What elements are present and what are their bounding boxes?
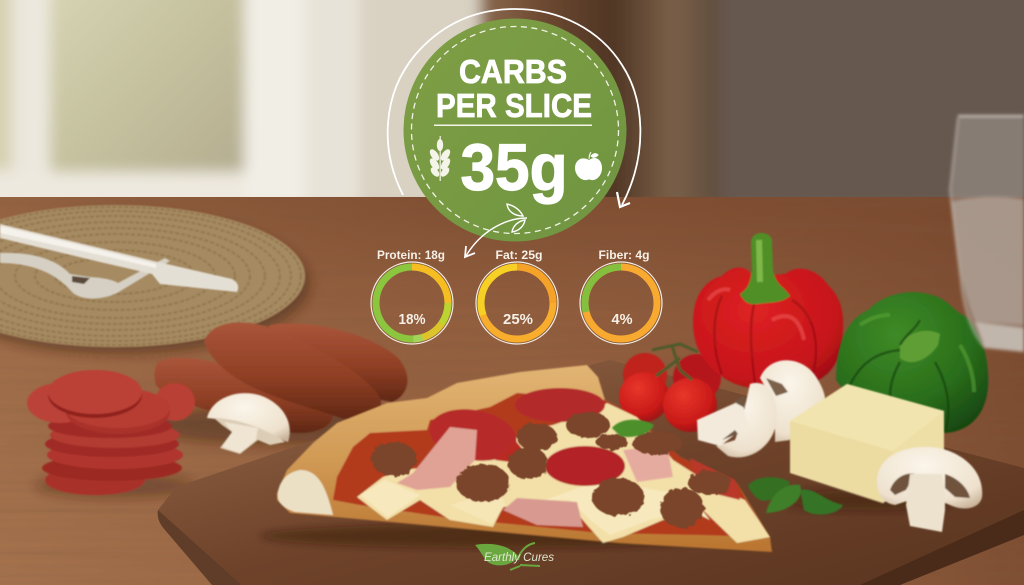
cut bread face — [278, 470, 333, 515]
dashed inner ring — [412, 26, 618, 234]
pepperoni stack — [27, 370, 195, 498]
left mushroom — [207, 393, 290, 454]
carbs badge: PER SLICE — [436, 87, 592, 124]
background: room wall, window and curtain — [0, 0, 1024, 212]
carbs badge — [388, 9, 640, 257]
protein ring: 18% — [398, 311, 426, 328]
front sausage — [204, 323, 381, 420]
divider under heading — [434, 124, 592, 126]
back sausage — [258, 323, 407, 402]
icon: apple — [575, 152, 602, 180]
lower sausage — [154, 358, 333, 433]
front mushroom — [877, 447, 982, 532]
fiber ring: Fiber: 4g — [598, 250, 650, 262]
heading: CARBS — [459, 53, 567, 90]
crust and base — [277, 365, 772, 552]
sauce — [333, 393, 768, 537]
fat ring: Fat: 25g — [496, 250, 542, 262]
fiber ring — [580, 250, 662, 344]
icon: wheat — [428, 136, 452, 181]
pepperoni slices — [515, 388, 605, 422]
fiber ring: 4% — [612, 311, 632, 328]
green bell pepper — [836, 292, 988, 433]
mushrooms behind cheese — [697, 360, 825, 457]
sausage crumbles on pizza — [371, 412, 732, 528]
fat ring — [476, 250, 558, 344]
sausages — [150, 323, 410, 445]
cutting board — [158, 360, 1024, 585]
basil leaf on pizza — [612, 420, 654, 437]
sliced mushroom — [716, 383, 777, 457]
cutlery: knife and fork — [0, 224, 238, 299]
placemat — [0, 205, 310, 354]
circular arrow — [388, 9, 640, 207]
leaf sprig arrow — [465, 204, 527, 257]
bacon pieces — [397, 427, 477, 490]
red bell pepper — [693, 233, 843, 392]
melted cheese — [357, 403, 770, 543]
pizza slice — [260, 365, 772, 552]
cheese block — [785, 384, 955, 510]
tomatoes — [619, 344, 721, 432]
standing mushroom — [760, 360, 825, 442]
protein ring — [371, 250, 453, 344]
nutrient rings — [371, 250, 662, 344]
badge circle — [404, 18, 626, 242]
background: wooden table — [0, 197, 1024, 585]
logo: Earthly Cures: Earthly Cures — [484, 550, 554, 564]
logo: Earthly Cures — [475, 543, 554, 570]
protein ring: Protein: 18g — [377, 250, 445, 262]
value: 35g — [460, 130, 568, 204]
fat ring: 25% — [503, 311, 533, 328]
basil leaves on board — [748, 477, 843, 515]
glass of water — [950, 115, 1024, 352]
